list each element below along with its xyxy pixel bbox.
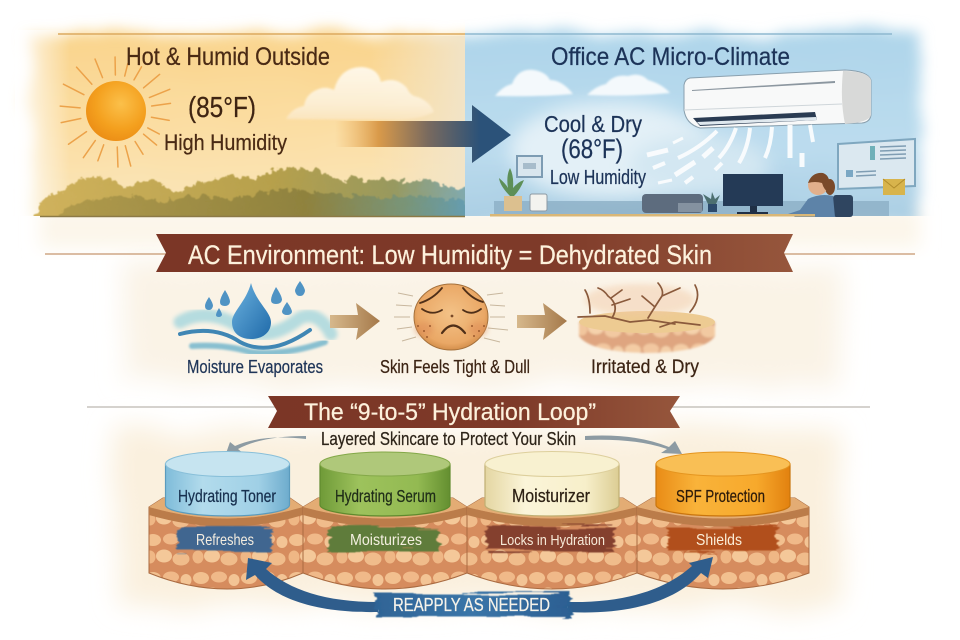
jar: SPF protection bbox=[656, 452, 790, 516]
pale parchment backgrounds bbox=[40, 208, 920, 606]
section rule 2 bbox=[87, 406, 870, 408]
printer bbox=[642, 194, 703, 213]
panel: office AC micro-climate bbox=[420, 34, 920, 224]
arrow: step two to three bbox=[517, 303, 567, 340]
label: low humidity: Low Humidity bbox=[550, 167, 646, 189]
jar: hydrating toner bbox=[166, 452, 290, 516]
label: moisturizer: Moisturizer bbox=[512, 486, 590, 506]
airflow streaks bbox=[647, 125, 813, 183]
badge: reapply as needed: REAPPLY AS NEEDED bbox=[393, 595, 550, 615]
clouds bbox=[495, 70, 670, 96]
strip: refreshes: Refreshes bbox=[196, 532, 254, 549]
label: skin feels tight: Skin Feels Tight & Dull bbox=[380, 357, 530, 377]
jar: moisturizer bbox=[485, 452, 619, 516]
icon: cracked dry skin bbox=[578, 283, 715, 353]
sun rays bbox=[60, 57, 170, 167]
banner: hydration loop: The “9-to-5” Hydration Loop” bbox=[304, 399, 596, 426]
potted plant bbox=[499, 168, 524, 211]
label: irritated and dry: Irritated & Dry bbox=[591, 357, 699, 378]
arrow: step one to two bbox=[330, 303, 380, 340]
strip: locks in hydration bbox=[487, 527, 614, 551]
heading: hot and humid: Hot & Humid Outside bbox=[126, 43, 330, 71]
banner: hydration loop bbox=[268, 396, 680, 428]
monitor bbox=[723, 174, 783, 215]
arrow: grey left bbox=[224, 436, 306, 459]
jar: hydrating serum bbox=[320, 452, 450, 516]
cloud bbox=[286, 67, 434, 120]
temperature: 68F: (68°F) bbox=[561, 134, 623, 164]
strip: moisturizes bbox=[329, 527, 438, 551]
label: cool and dry: Cool & Dry bbox=[544, 111, 642, 137]
wall frame bbox=[517, 156, 542, 177]
arrow: grey right bbox=[585, 435, 682, 454]
section rule 1 bbox=[45, 253, 915, 255]
skin block: moisturizes bbox=[303, 498, 467, 589]
banner: AC environment: AC Environment: Low Humidity = Dehydrated Skin bbox=[188, 240, 712, 270]
icon: tight dull skin face bbox=[394, 284, 508, 350]
office wall band bbox=[494, 201, 889, 216]
arrow: reapply left bbox=[246, 558, 378, 612]
trees bbox=[35, 169, 470, 220]
office worker bbox=[788, 173, 853, 217]
label: high humidity: High Humidity bbox=[164, 130, 287, 155]
heading: office AC: Office AC Micro-Climate bbox=[551, 43, 790, 71]
strip: shields bbox=[668, 527, 777, 551]
skin block: refreshes bbox=[149, 498, 303, 589]
label: moisture evaporates: Moisture Evaporates bbox=[187, 357, 323, 377]
panel rules bbox=[40, 34, 892, 216]
label: SPF protection: SPF Protection bbox=[676, 486, 765, 506]
skin block: locks bbox=[467, 498, 637, 589]
strip: moisturizes: Moisturizes bbox=[350, 532, 422, 549]
arrow: reapply right bbox=[568, 557, 713, 612]
strip: locks in hydration: Locks in Hydration bbox=[500, 532, 605, 549]
icon: sun bbox=[86, 81, 146, 141]
label: hydrating toner: Hydrating Toner bbox=[178, 486, 276, 506]
strip: shields: Shields bbox=[696, 532, 742, 549]
temperature: 85F: (85°F) bbox=[188, 92, 256, 124]
panel: hot and humid outside bbox=[22, 18, 465, 216]
skin block: shields bbox=[637, 498, 809, 589]
envelope bbox=[883, 179, 905, 195]
strip: refreshes bbox=[178, 527, 272, 551]
cup bbox=[530, 194, 547, 211]
notice board bbox=[838, 139, 915, 189]
icon: air conditioner bbox=[684, 70, 871, 128]
arrow: hot to cool bbox=[335, 105, 511, 163]
waves bbox=[180, 315, 331, 353]
label: hydrating serum: Hydrating Serum bbox=[335, 486, 436, 506]
subtitle: Layered Skincare to Protect Your Skin bbox=[321, 429, 576, 449]
icon: moisture evaporates bbox=[180, 281, 331, 353]
desk plant bbox=[703, 192, 720, 212]
desk surface bbox=[490, 214, 815, 216]
